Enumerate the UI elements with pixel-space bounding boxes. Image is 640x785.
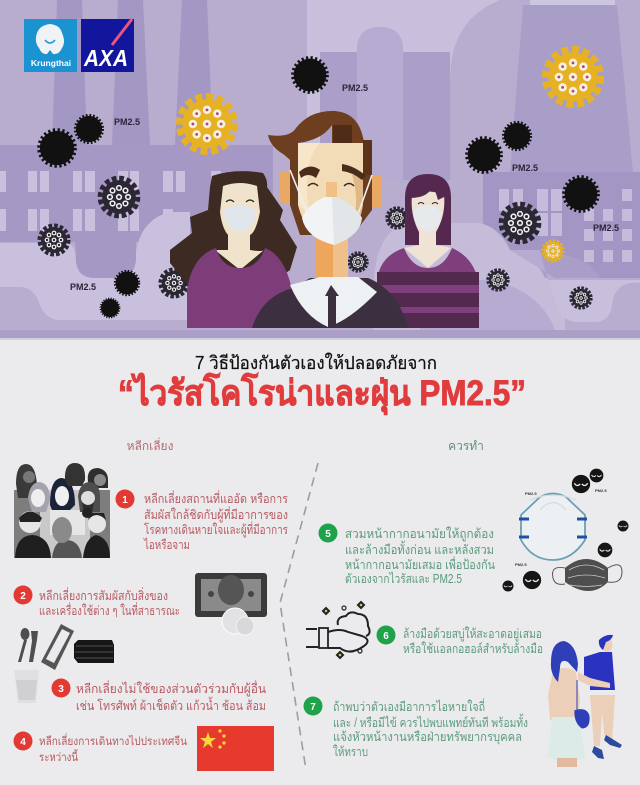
logo: AXA: AXA [83,45,128,71]
text 3: เช่น โทรศัพท์ ผ้าเช็ดตัว แก้วน้ำ ช้อน ส้อม [76,696,266,713]
text 7 [333,698,528,759]
hero banner: factory background [0,0,640,340]
PM2.5 labels: PM2.5 [342,83,368,93]
badge 1: 1 [122,495,128,506]
text 4: หลีกเลี่ยงการเดินทางไปประเทศจีน [39,733,187,748]
man hair [599,635,613,650]
icon: folded towels [74,640,114,663]
text 1 [143,490,288,552]
small labels: PM2.5 [525,491,537,496]
icon: white face mask with dust: PM2.5 [515,562,527,567]
text 4: ระหว่างนี้ [39,749,78,764]
man arm [578,672,610,688]
text 7: และ / หรือมีไข้ ควรไปพบแพทย์ทันที พร้อมทั้ง [333,713,528,730]
icon: glass of water [14,670,39,703]
mask straps [290,170,372,214]
man in the centre [252,111,408,328]
skirt [548,717,586,761]
purple top [187,248,292,328]
badge 3: 3 [58,684,64,695]
icon: banknote and coins [195,573,267,635]
text 6: หรือใช้แอลกอฮอล์สำหรับล้างมือ [403,642,543,656]
text 5 [345,527,495,586]
icon: white face mask with dust [502,469,628,592]
text 7: ถ้าพบว่าตัวเองมีอาการไอหายใจถี่ [333,698,485,714]
text 4 [39,733,187,764]
legs [557,758,577,767]
eyes [308,184,354,186]
icon: spoon and fork [18,628,38,662]
heading: avoid: หลีกเลี่ยง [127,437,173,453]
icon: hand washing [306,602,370,658]
text 3: หลีกเลี่ยงไม่ใช้ของส่วนตัวร่วมกับผู้อื่น [76,680,266,697]
logo: Krungthai: Krungthai [31,58,71,68]
back hair [290,150,372,235]
badge 6 [376,626,396,644]
man trousers [590,695,615,746]
man t-shirt [584,652,615,690]
icon: white face mask with dust: PM2.5 [595,488,607,493]
jacket [252,278,408,328]
text 1: หลีกเลี่ยงสถานที่แออัด หรือการ [144,490,288,506]
text 7: แจ้งหัวหน้างานหรือฝ่ายทรัพยากรบุคคล [333,730,522,745]
badge 2: 2 [20,591,26,602]
text 2 [39,587,180,618]
woman on the left [170,171,297,328]
PM2.5 labels: PM2.5 [114,117,140,127]
woman hair [551,641,578,682]
smiling eyes [226,200,254,202]
badge 6: 6 [383,631,389,642]
text 3 [76,680,266,713]
subtitle: 7 วิธีป้องกันตัวเองให้ปลอดภัยจาก [195,352,437,373]
text 5: หน้ากากอนามัยเสมอ เพื่อป้องกัน [345,556,495,572]
hair [405,174,451,245]
badge 2 [14,586,32,604]
badge 5 [318,524,338,542]
icon: crowd of people [14,463,110,558]
eyebrows [299,166,320,178]
text 1: สัมผัสใกล้ชิดกับผู้ที่มีอาการของ [144,506,288,523]
text 6: ล้างมือด้วยสบู่ให้สะอาดอยู่เสมอ [403,627,542,642]
face [298,143,363,240]
logo: AXA [81,19,134,72]
PM2.5 labels: PM2.5 [593,223,619,233]
icon: smartphone [41,624,74,670]
face and neck [215,183,264,270]
long dark hair [170,171,297,284]
heading: should do: ควรทำ [448,439,484,453]
stripes [377,272,479,328]
coronavirus particles [40,179,591,308]
badge 7 [304,696,322,716]
yellow virus particles [181,51,599,261]
main title: “ไวรัสโคโรน่าและฝุ่น PM2.5” [118,372,526,415]
tie [325,285,339,328]
man head [602,638,612,652]
front hair [268,111,364,160]
skin [404,192,451,268]
PM2.5 labels: PM2.5 [512,163,538,173]
woman on the right [377,174,479,328]
woman body [548,668,580,720]
badge 5: 5 [325,529,331,540]
black face mask [565,559,608,591]
nose [326,182,337,197]
neck [315,235,333,278]
text 1: โรคทางเดินหายใจและผู้ที่มีอาการ [144,521,288,538]
text 5: สวมหน้ากากอนามัยให้ถูกต้อง [345,527,494,542]
badge 4 [14,732,32,750]
face mask [224,205,255,232]
logo: Krungthai [24,19,77,72]
text 5: ตัวเองจากไวรัสและ PM2.5 [345,572,462,586]
PM2.5 labels: PM2.5 [70,282,96,292]
striped top [377,248,479,328]
mask [413,205,441,232]
ears [280,172,297,204]
PM2.5 labels [70,83,619,292]
text 7: ให้ทราบ [333,745,368,759]
illustration: couple walking [548,635,622,767]
text 2: หลีกเลี่ยงการสัมผัสกับสิ่งของ [39,587,168,603]
text 5: และล้างมือทั้งก่อน และหลังสวม [345,540,494,557]
dashed divider [280,463,318,770]
icon: flag of China [197,726,274,771]
eyes [418,202,438,204]
PM2.5 dust particles [39,58,598,318]
dust faces [572,475,590,493]
shoulder bag [575,680,589,728]
text 6 [403,627,543,656]
text 1: ไอหรือจาม [143,538,190,552]
text 2: และเครื่องใช้ต่าง ๆ ในที่สาธารณะ [39,602,180,618]
badge 1 [116,490,134,508]
fringe [408,178,448,200]
shirt [290,277,377,327]
face mask [302,197,362,245]
badge 3 [52,678,70,698]
badge 7: 7 [310,702,316,713]
badge 4: 4 [20,737,26,748]
man shoes [592,746,604,759]
